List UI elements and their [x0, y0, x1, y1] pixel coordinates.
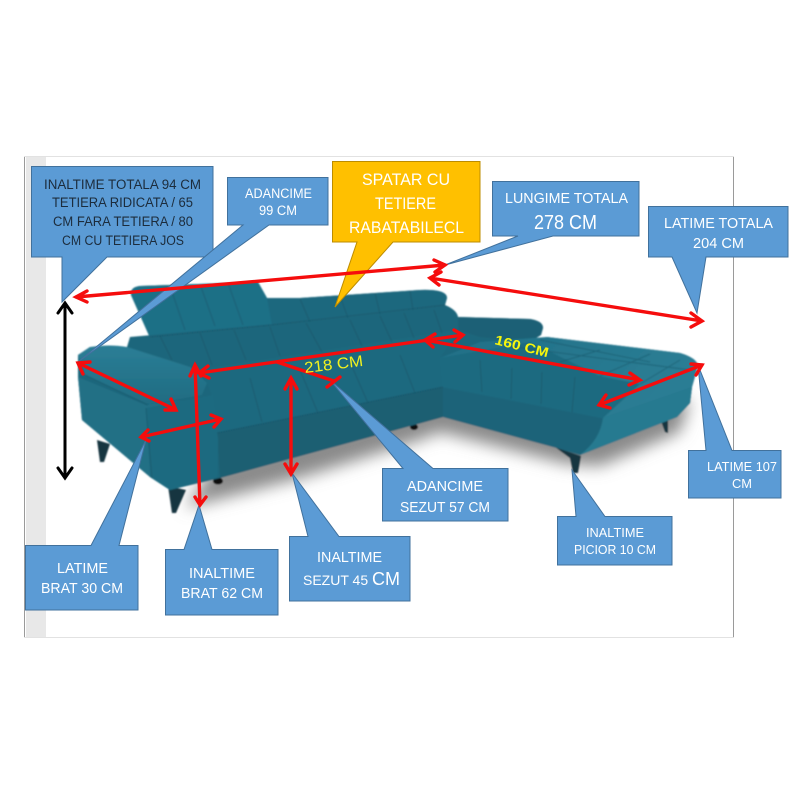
callout: leg height: PICIOR 10 CM — [574, 542, 656, 557]
main base — [217, 387, 443, 478]
callout: seat depth: SEZUT 57 CM — [400, 500, 490, 516]
callout: chaise width: CM — [732, 476, 752, 491]
callout: leg height — [558, 470, 672, 565]
headrests — [131, 282, 447, 338]
left arm body — [78, 377, 218, 490]
callout: total length: LUNGIME TOTALA — [505, 190, 628, 207]
callout: total height — [32, 166, 213, 302]
left arm top — [78, 346, 207, 405]
callout: depth 99 cm: 99 CM — [259, 203, 297, 218]
arrow: arm height — [190, 365, 206, 505]
callout: total width: 204 CM — [693, 236, 744, 252]
callout: leg height: INALTIME — [586, 525, 644, 540]
chaise top — [440, 337, 698, 418]
callout: total width: LATIME TOTALA — [664, 216, 773, 232]
callout: seat height: INALTIME — [317, 550, 382, 566]
callout: total length — [445, 182, 639, 265]
arrow: total height — [58, 303, 72, 478]
callout: chaise width — [688, 365, 781, 498]
callout: total width — [648, 206, 788, 313]
arrow: seat depth — [277, 362, 340, 387]
callout: total height: INALTIME TOTALA 94 CM — [44, 177, 201, 192]
arrow: chaise width — [599, 364, 702, 408]
sofa silhouette — [78, 282, 698, 490]
callout: reclining headrests — [332, 162, 480, 307]
main seat — [197, 330, 458, 433]
sofa legs — [97, 419, 668, 513]
callout: arm width: LATIME — [57, 561, 108, 577]
arrow: overall depth — [78, 362, 176, 410]
arrow: chaise length — [425, 334, 640, 385]
chaise base — [443, 387, 692, 455]
label: 218 cm: 218 CM — [303, 353, 364, 377]
corner sofa illustration — [78, 282, 698, 513]
callout: seat height: SEZUT 45 CM — [303, 569, 400, 589]
callout: arm height: INALTIME — [189, 566, 255, 582]
arrow: main seat length — [199, 330, 463, 378]
callout: total height: TETIERA RIDICATA / 65 — [52, 195, 193, 210]
callout: seat depth: ADANCIME — [407, 479, 483, 495]
callout: arm height: BRAT 62 CM — [181, 586, 263, 602]
callout: depth 99 cm — [78, 178, 328, 362]
callout: depth 99 cm: ADANCIME — [245, 186, 312, 201]
callout: chaise width: LATIME 107 — [707, 459, 777, 474]
back cushion — [130, 308, 457, 370]
upholstery lines — [85, 283, 690, 478]
floor shadow — [185, 400, 690, 508]
callout: arm height — [166, 505, 278, 615]
callout: seat depth — [330, 380, 508, 521]
arrow: arm width — [141, 415, 221, 441]
arrow: seat height — [285, 378, 297, 474]
arrow: total length — [76, 260, 445, 302]
callout: total length: 278 CM — [534, 212, 597, 234]
callout: reclining headrests: SPATAR CU — [362, 170, 450, 189]
callout: reclining headrests: TETIERE — [375, 194, 436, 213]
label: 160 cm: 160 CM — [493, 332, 550, 360]
arrow: total width — [430, 272, 702, 327]
callout: seat height — [290, 473, 410, 601]
callout: total height: CM FARA TETIERA / 80 — [53, 214, 193, 229]
callout: arm width: BRAT 30 CM — [41, 581, 123, 597]
callout: arm width — [26, 440, 146, 610]
right armrest — [458, 317, 543, 342]
page frame — [24, 156, 734, 638]
callout: reclining headrests: RABATABILECL — [349, 218, 464, 237]
callout: total height: CM CU TETIERA JOS — [62, 233, 184, 248]
